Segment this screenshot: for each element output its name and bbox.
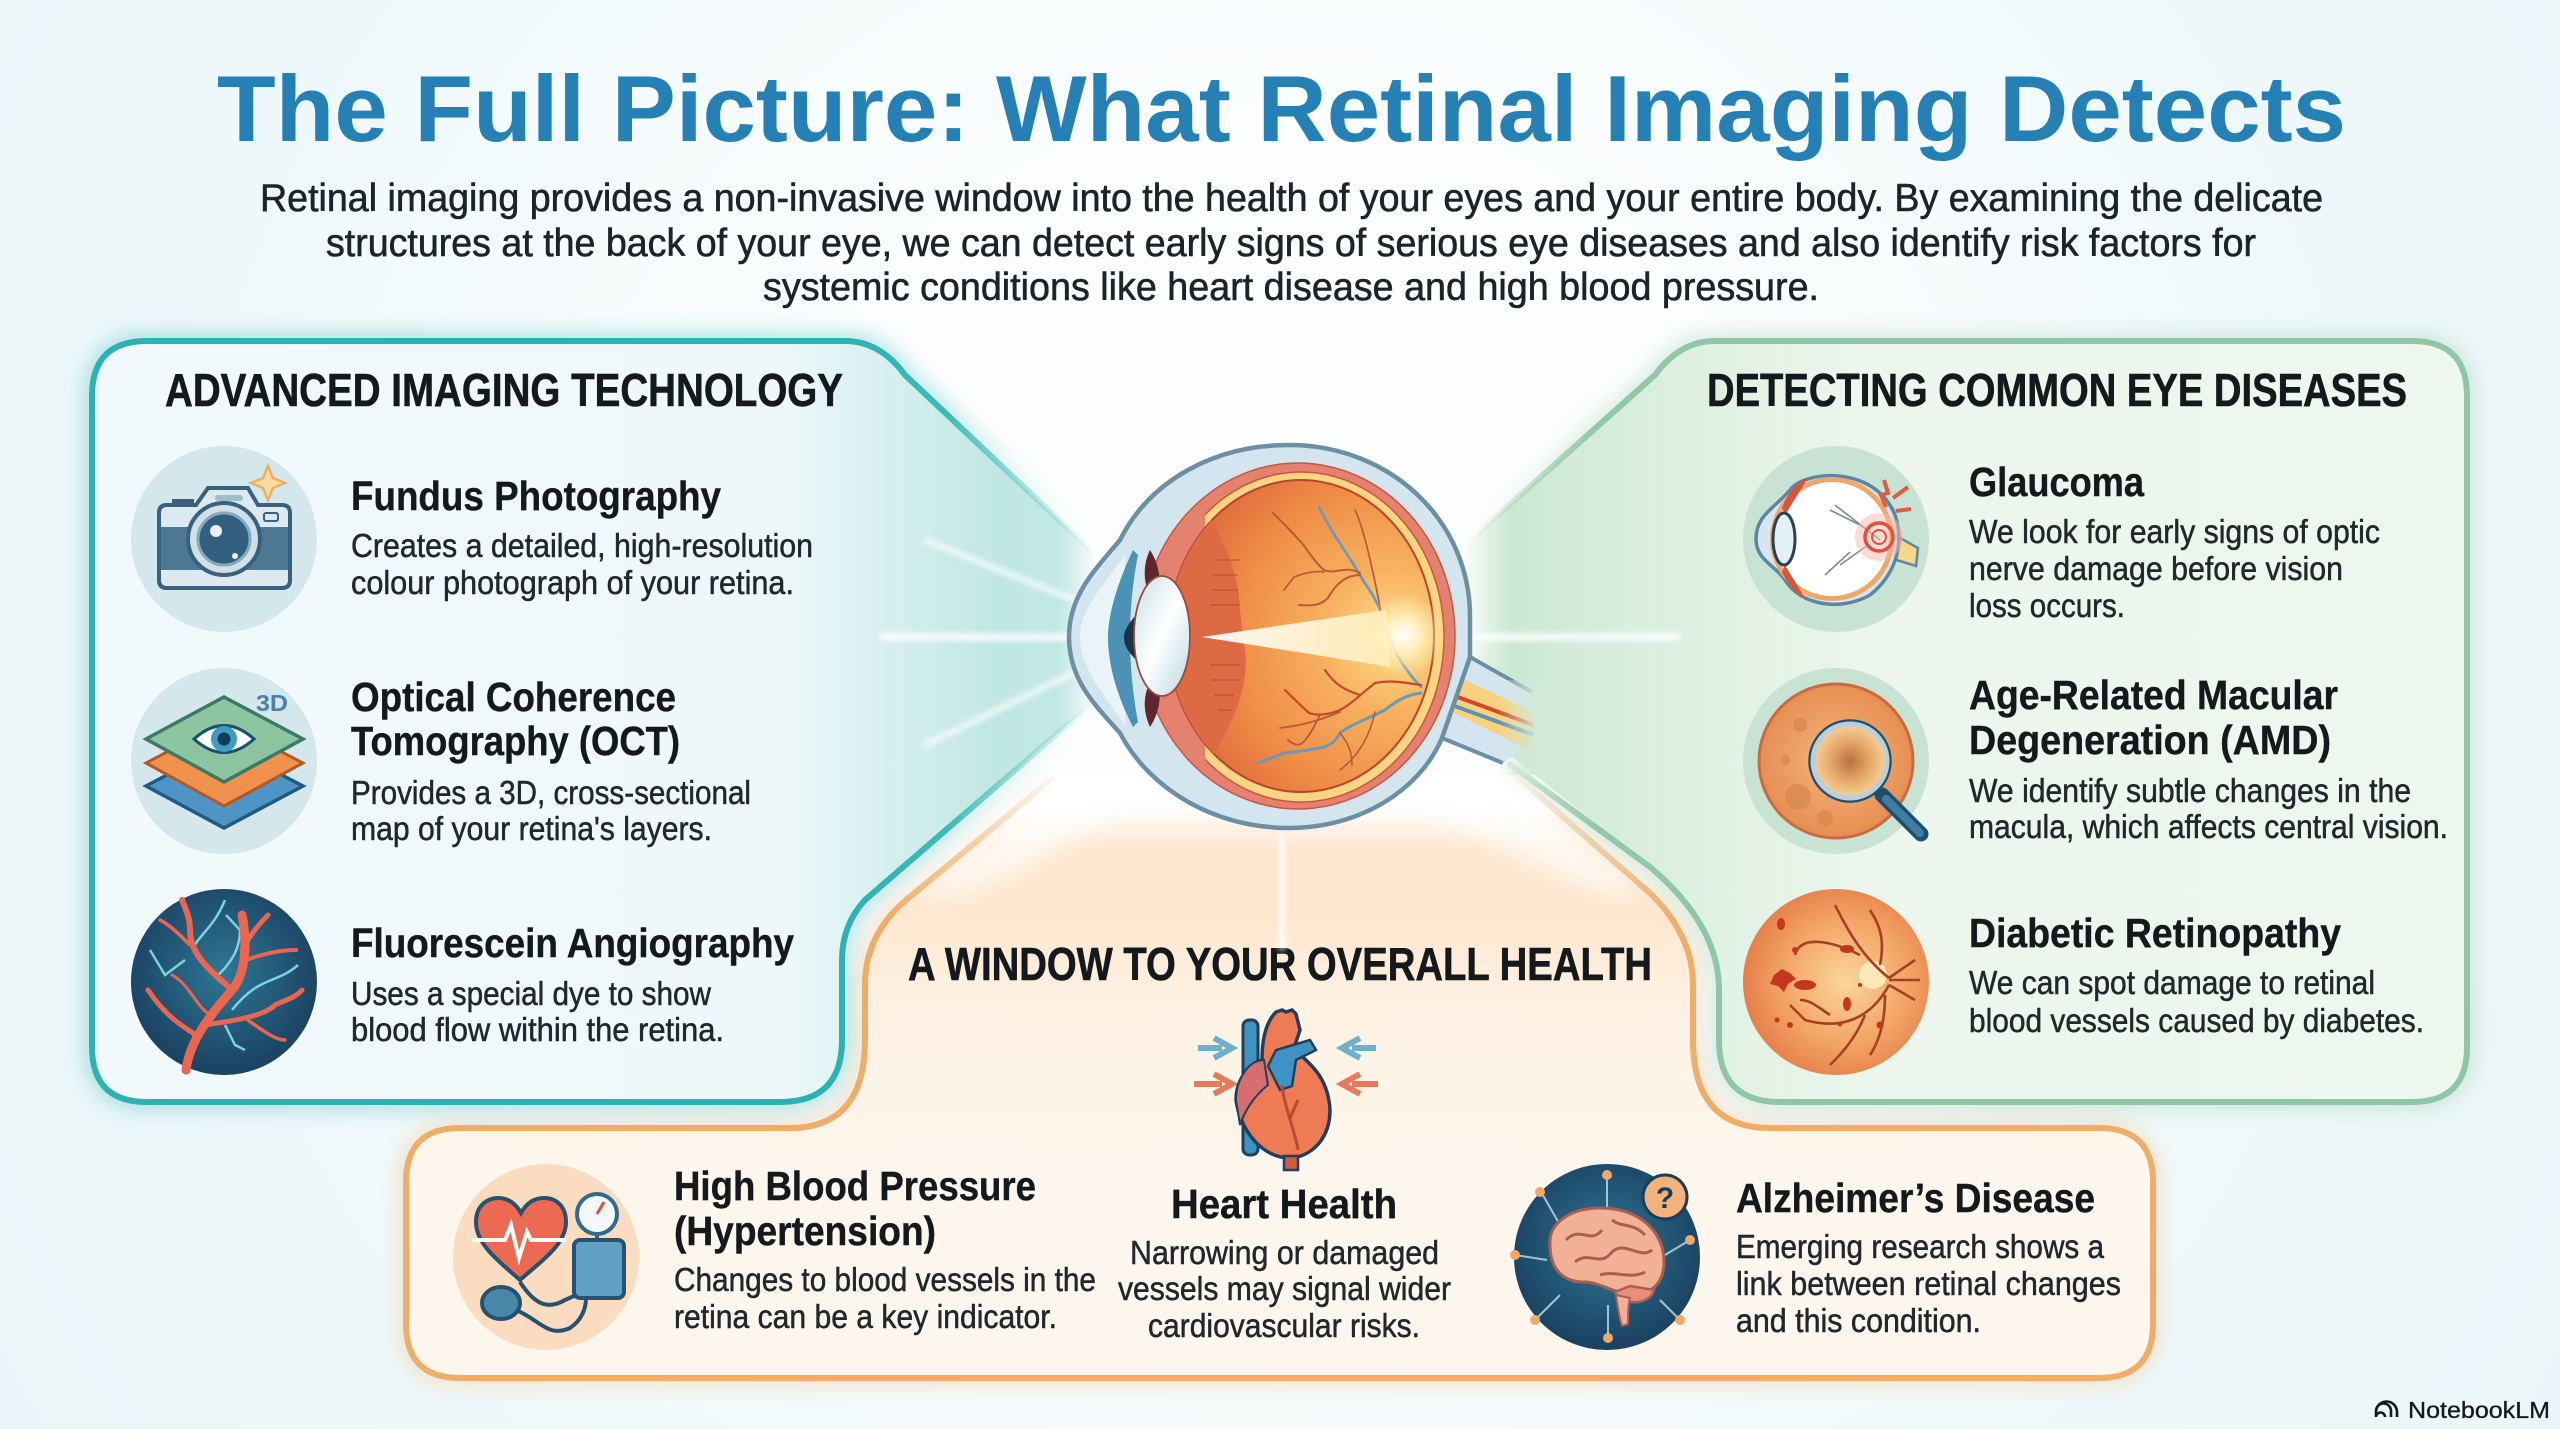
item title: Diabetic Retinopathy: [1969, 910, 2341, 956]
item description: colour photograph of your retina.: [351, 564, 794, 601]
light rays: [880, 540, 1680, 950]
icon: brain: [1510, 1164, 1700, 1350]
cornea: [1080, 555, 1125, 725]
item title: Fluorescein Angiography: [351, 920, 794, 966]
light ray over eye: [1062, 634, 1680, 640]
item description: Provides a 3D, cross-sectional: [351, 774, 751, 811]
item description: loss occurs.: [1969, 587, 2125, 624]
item: age-related macular degeneration: [1743, 668, 2448, 854]
item description: [1736, 1228, 2121, 1339]
item description: We look for early signs of optic: [1969, 513, 2380, 550]
item title: [351, 674, 680, 764]
item description: blood flow within the retina.: [351, 1011, 724, 1048]
item: heart health: [1118, 1010, 1451, 1344]
panel: a window to your overall health: [406, 773, 2153, 1378]
icon: layered retina scan: 3D: [256, 690, 288, 716]
item description: [674, 1261, 1096, 1335]
vessels: [1258, 507, 1421, 770]
panel heading: eye diseases: DETECTING COMMON EYE DISEASES: [1707, 364, 2407, 416]
retina interior: [1168, 480, 1434, 792]
item description: blood vessels caused by diabetes.: [1969, 1002, 2424, 1039]
item title: Optical Coherence: [351, 674, 676, 720]
icon: heart with arrows: [1194, 1010, 1378, 1170]
item title: Alzheimer’s Disease: [1736, 1175, 2095, 1221]
icon: layered retina scan: [131, 668, 317, 854]
icon: brain: ?: [1656, 1182, 1674, 1215]
intro text block: Retinal imaging provides a non-invasive window into the health of your eyes and your entire body. By examining the delicate: [260, 177, 2323, 220]
item description: [351, 975, 724, 1048]
item title: Degeneration (AMD): [1969, 717, 2331, 763]
item description: We identify subtle changes in the: [1969, 772, 2411, 809]
lens: [1134, 576, 1190, 696]
icon: eye with optic nerve damage: [1743, 446, 1929, 632]
light beam into eye: [1202, 610, 1391, 667]
icon: magnifier over macula: [1743, 668, 1929, 854]
item description: and this condition.: [1736, 1302, 1981, 1339]
item: optical coherence tomography: [131, 668, 751, 854]
item description: retina can be a key indicator.: [674, 1298, 1057, 1335]
item description: [1118, 1234, 1451, 1344]
pupil: [1124, 615, 1136, 660]
item description: [351, 527, 813, 601]
item description: nerve damage before vision: [1969, 550, 2343, 587]
item description: Uses a special dye to show: [351, 975, 711, 1012]
item description: [351, 774, 751, 847]
item description: Creates a detailed, high-resolution: [351, 527, 813, 564]
item description: [1969, 513, 2380, 624]
item title: [674, 1163, 1036, 1254]
intro text block: [260, 177, 2323, 309]
watermark: NotebookLM: NotebookLM: [2408, 1397, 2550, 1423]
item description: We can spot damage to retinal: [1969, 964, 2375, 1001]
item description: vessels may signal wider: [1118, 1270, 1451, 1307]
panel: advanced imaging technology: [92, 341, 1094, 1102]
item description: link between retinal changes: [1736, 1265, 2121, 1302]
item description: Changes to blood vessels in the: [674, 1261, 1096, 1298]
sclera and cornea outline: [1069, 445, 1470, 828]
ciliary body: [1145, 550, 1160, 727]
item description: [1969, 964, 2424, 1039]
item: diabetic retinopathy: [1743, 889, 2424, 1075]
item title: Fundus Photography: [351, 473, 721, 519]
panel heading: overall health: A WINDOW TO YOUR OVERALL HEALTH: [908, 938, 1652, 990]
icon: blood vessels under dye: [131, 889, 317, 1075]
item title: Age-Related Macular: [1969, 672, 2338, 718]
item title: Glaucoma: [1969, 459, 2145, 505]
item title: Tomography (OCT): [351, 718, 680, 764]
front darker band: [1176, 520, 1246, 754]
item description: cardiovascular risks.: [1148, 1307, 1420, 1344]
icon: heart with blood pressure cuff: [453, 1164, 639, 1350]
item title: Heart Health: [1171, 1181, 1397, 1227]
iris: [1108, 550, 1138, 727]
item title: High Blood Pressure: [674, 1163, 1036, 1209]
item description: Narrowing or damaged: [1130, 1234, 1439, 1271]
choroid layer: [1141, 463, 1455, 809]
item description: [1969, 772, 2448, 845]
panel heading: imaging technology: ADVANCED IMAGING TECHNOLOGY: [165, 364, 843, 416]
central eye illustration: [880, 445, 1680, 950]
item title: [1969, 672, 2338, 763]
optic nerve: [1422, 657, 1540, 775]
icon: camera: [131, 446, 317, 632]
item title: (Hypertension): [674, 1208, 936, 1254]
item: fluorescein angiography: [131, 889, 794, 1075]
item description: Emerging research shows a: [1736, 1228, 2105, 1265]
item: glaucoma: [1743, 446, 2380, 632]
title: The Full Picture: What Retinal Imaging Detects: [217, 56, 2346, 161]
item: high blood pressure: [453, 1163, 1096, 1350]
retina yellow band: [1205, 471, 1445, 803]
item description: map of your retina's layers.: [351, 810, 712, 847]
intro text block: systemic conditions like heart disease and high blood pressure.: [763, 266, 1819, 309]
panel: detecting common eye diseases: [1467, 341, 2467, 1102]
icon: retina with hemorrhages: [1743, 889, 1929, 1075]
intro text block: structures at the back of your eye, we can detect early signs of serious eye diseases and also identify risk factors for: [326, 222, 2256, 265]
item: alzheimers disease: [1510, 1164, 2121, 1350]
item: fundus photography: [131, 446, 813, 632]
item description: macula, which affects central vision.: [1969, 808, 2448, 845]
